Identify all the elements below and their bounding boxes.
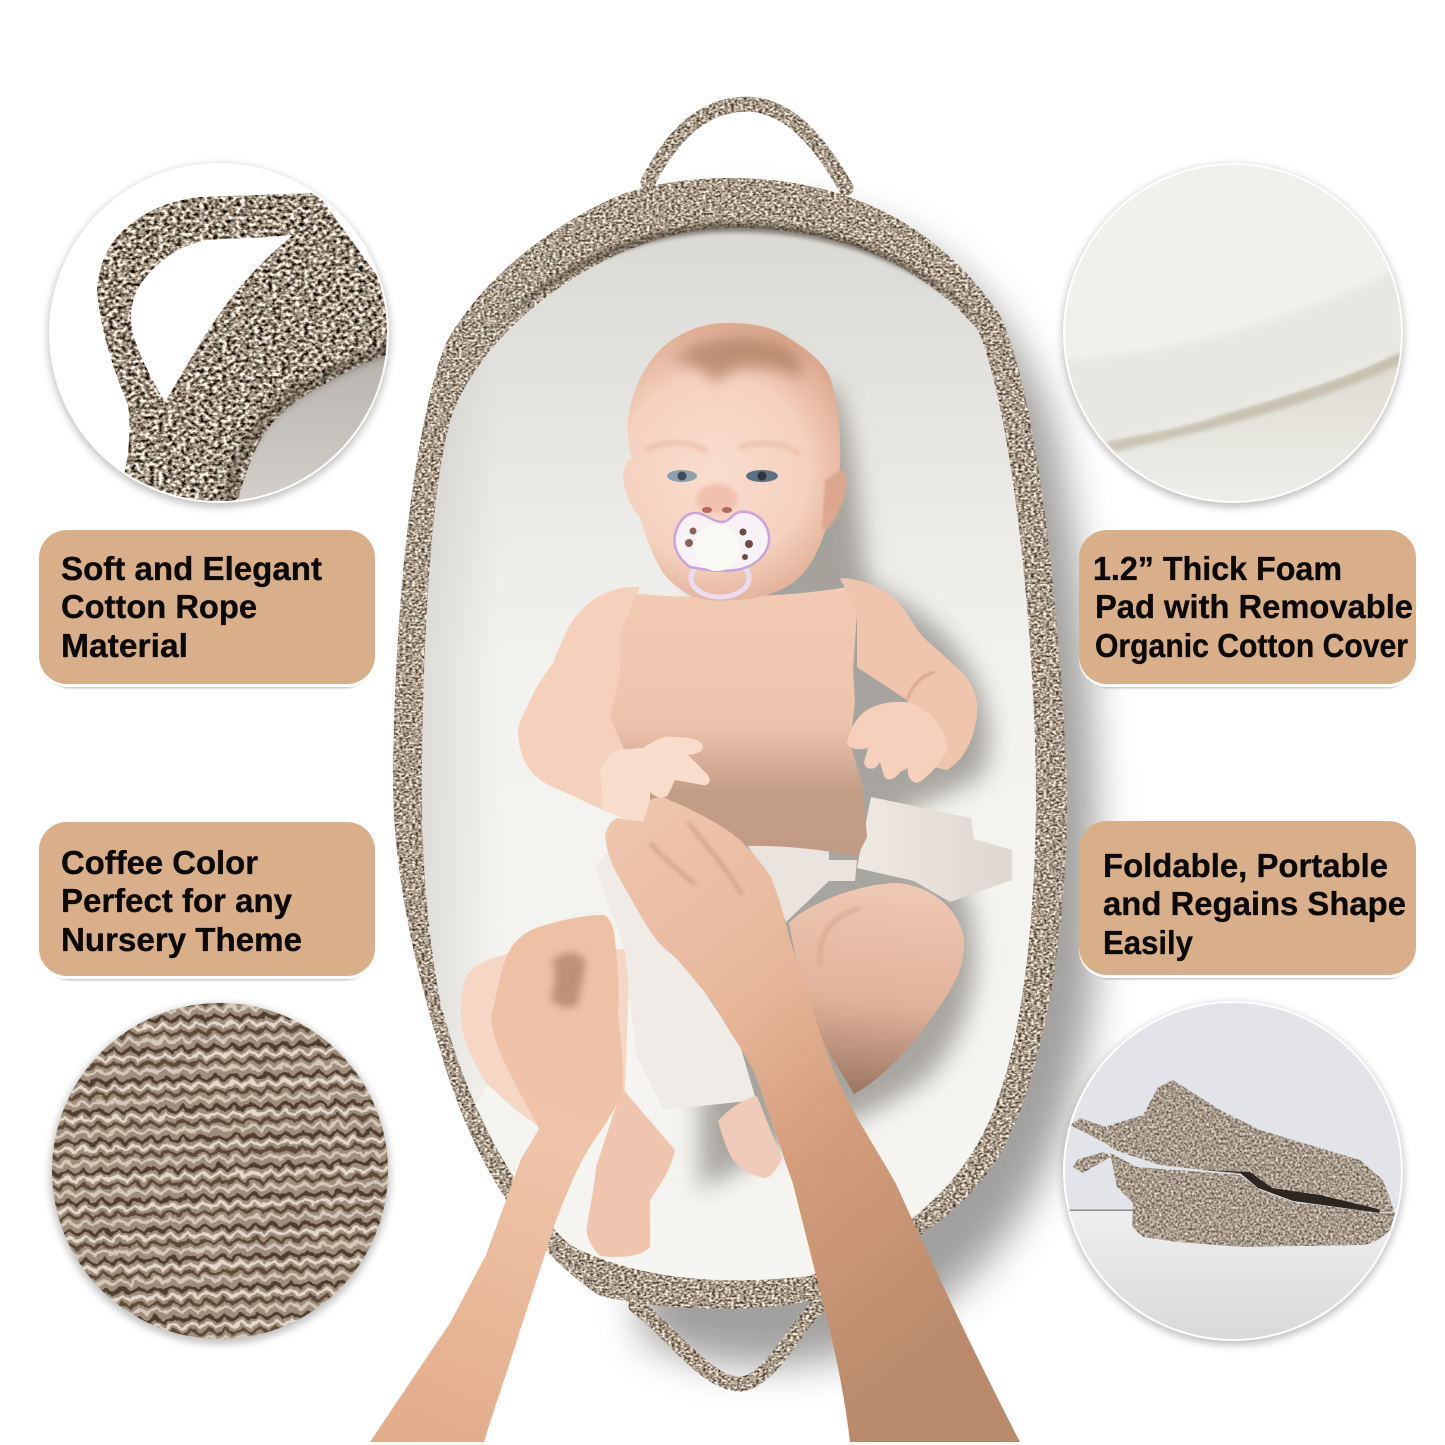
left arm — [518, 587, 640, 810]
foam edge shadow — [1105, 350, 1405, 452]
eyebrows — [646, 443, 800, 455]
detail photo: rope handle — [48, 163, 395, 507]
circle shadow — [1062, 165, 1404, 507]
fold shadow — [1203, 1170, 1380, 1213]
label: soft and elegant: Cotton Rope — [61, 588, 257, 625]
circle shadow — [48, 165, 390, 507]
label: coffee color: Perfect for any — [61, 882, 293, 919]
leg crease — [820, 908, 860, 965]
basket shadow — [640, 210, 1095, 1366]
nose — [696, 484, 738, 514]
label: foldable — [1079, 821, 1417, 979]
detail photo: foam pad — [1060, 160, 1405, 507]
lower surface — [1106, 352, 1400, 484]
eyes — [667, 470, 778, 482]
label shadow — [42, 832, 373, 980]
white pad — [422, 228, 1036, 1280]
right hand finger lines — [650, 822, 742, 895]
circle shadow — [50, 1004, 390, 1344]
lower fold — [1110, 1153, 1395, 1247]
elbow crease — [907, 672, 935, 700]
pad — [238, 356, 386, 500]
diaper wing — [857, 797, 1012, 902]
label: thick foam pad: 1.2” Thick Foam — [1093, 550, 1342, 587]
diaper front — [595, 852, 756, 1110]
label: coffee color — [39, 822, 376, 980]
torso — [610, 585, 867, 857]
top handle — [648, 104, 846, 188]
label: thick foam pad — [1079, 530, 1417, 688]
pad side shading — [422, 228, 735, 1105]
label: thick foam pad: Pad with Removable — [1095, 588, 1413, 625]
label: soft and elegant: Soft and Elegant — [61, 550, 322, 587]
adult hands and arms — [370, 797, 1020, 1442]
right arm — [840, 578, 977, 770]
label: soft and elegant — [39, 530, 376, 688]
left arm and hand — [370, 915, 623, 1442]
diaper upper band — [746, 843, 857, 922]
label shadow — [1082, 831, 1414, 979]
dark rim by pad — [225, 347, 395, 505]
foam side band — [1068, 275, 1401, 440]
right ear — [822, 470, 847, 530]
label: foldable: and Regains Shape — [1103, 885, 1406, 922]
inner rim shadow — [500, 222, 985, 325]
label: coffee color: Nursery Theme — [61, 921, 302, 958]
baby head — [623, 323, 840, 601]
hair — [672, 337, 802, 382]
bottom handle — [636, 1306, 818, 1384]
right leg — [789, 883, 964, 1094]
upper fold — [1107, 1080, 1395, 1213]
label: soft and elegant: Material — [61, 627, 188, 664]
left foot — [587, 1088, 675, 1257]
label shadow — [42, 540, 373, 688]
detail photo: folded basket — [1060, 1000, 1405, 1345]
circle shadow — [1062, 1003, 1404, 1345]
folded handles — [1070, 1118, 1112, 1173]
rope band and handle — [97, 193, 395, 505]
left hand — [600, 737, 710, 825]
baby — [460, 323, 1012, 1257]
baby shadow — [700, 380, 989, 1190]
rope rim — [393, 178, 1067, 1309]
basket illustration — [393, 104, 1067, 1384]
label: thick foam pad: Organic Cotton Cover — [1095, 627, 1408, 664]
label: coffee color: Coffee Color — [61, 844, 258, 881]
detail photo: rope texture — [46, 1000, 394, 1348]
left hand palm shadow — [550, 953, 586, 1008]
left leg — [460, 948, 630, 1140]
label: foldable: Foldable, Portable — [1103, 847, 1388, 884]
right foot — [718, 1096, 782, 1178]
pacifier — [674, 512, 769, 597]
label: foldable: Easily — [1103, 924, 1194, 961]
right arm and hand — [605, 797, 1020, 1442]
right hand — [847, 702, 947, 783]
label shadow — [1082, 540, 1414, 688]
